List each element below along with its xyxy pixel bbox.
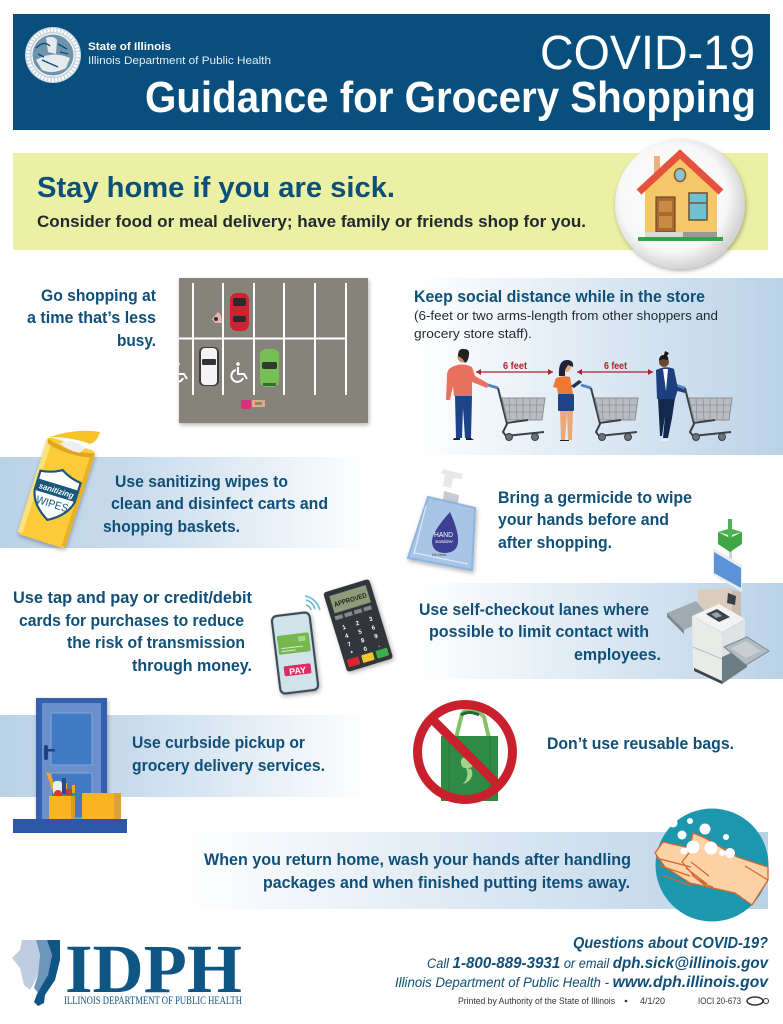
- text: delivery advice: Consider food or meal delivery; have family or friends shop for you.: [37, 213, 586, 231]
- icon: self-checkout kiosk: [667, 519, 769, 684]
- text: go shopping at quiet time: [27, 287, 156, 350]
- icon: state seal: [25, 27, 81, 83]
- icon: wipes canister: [17, 431, 100, 549]
- illustration: parking lot: [171, 278, 368, 423]
- icon: phone paying by tap: [271, 596, 320, 694]
- text: six feet explanation: grocery store staff).: [414, 326, 532, 341]
- text: use wipes: Use sanitizing wipes to: [115, 473, 288, 491]
- print line: [458, 996, 768, 1006]
- text: curbside: grocery delivery services.: [132, 757, 325, 775]
- icon: card terminal: 8: [360, 638, 366, 645]
- red car: [230, 293, 249, 331]
- text: go shopping at quiet time: busy.: [117, 332, 156, 350]
- print line: Printed by Authority of the State of Illinois: [458, 996, 615, 1006]
- text: go shopping at quiet time: Go shopping at: [41, 287, 156, 305]
- icon: card terminal: 3: [369, 616, 374, 623]
- print line: IOCI 20-673: [698, 996, 741, 1006]
- icon: washing hands: [655, 808, 768, 922]
- panel: self-checkout: [415, 583, 783, 679]
- person: woman with tablet: [553, 360, 638, 441]
- contact information: Call 1-800-889-3931 or email dph.sick@illinois.gov: [427, 955, 769, 972]
- text: use wipes: shopping baskets.: [103, 518, 240, 536]
- panel: curbside pickup: [0, 715, 370, 797]
- wheelchair symbols: [171, 362, 247, 382]
- agency name: [88, 41, 271, 67]
- icon: hand sanitizer bottle: HAND: [434, 532, 453, 539]
- contact information: Illinois Department of Public Health - www.dph.illinois.gov: [395, 974, 769, 991]
- icon: card terminal: APPROVED: [333, 592, 368, 609]
- icon: card terminal: 1: [342, 625, 347, 631]
- panel: stay home: [13, 153, 768, 250]
- text: tap and pay: through money.: [132, 657, 252, 675]
- panel: wash hands: [180, 832, 768, 909]
- shoppers in lot: [212, 312, 265, 409]
- icon: card terminal: 6: [371, 625, 377, 632]
- logo: IDPH: [12, 931, 242, 1007]
- icon: hand sanitizer bottle: Sanitizer: [435, 539, 454, 544]
- header banner: [13, 14, 770, 130]
- print line: 4/1/20: [640, 996, 665, 1006]
- agency name: Illinois Department of Public Health: [88, 55, 271, 67]
- wordmark: IDPH: [65, 931, 242, 1007]
- icon: card terminal: .: [377, 643, 381, 649]
- text: bring a germicide: after shopping.: [498, 534, 612, 552]
- text: bring a germicide: Bring a germicide to wipe: [498, 489, 692, 507]
- text: tap and pay: cards for purchases to reduce: [19, 612, 244, 630]
- icon: wipes canister: sanitizing: [38, 481, 75, 500]
- text: bring a germicide: [498, 489, 692, 552]
- text: wash hands: packages and when finished putting items away.: [263, 874, 630, 892]
- panel: social distance: [414, 278, 783, 455]
- text: self-checkout lanes: employees.: [574, 646, 661, 664]
- text: tap and pay: Use tap and pay or credit/debit: [13, 589, 252, 607]
- text: no reusable bags: Don’t use reusable bags.: [547, 735, 734, 753]
- icon: card terminal: 5: [358, 629, 363, 636]
- icon: card terminal: 7: [347, 642, 353, 649]
- wordmark subtitle: ILLINOIS DEPARTMENT OF PUBLIC HEALTH: [64, 995, 242, 1007]
- distance arrows: [476, 361, 653, 375]
- contact information: Questions about COVID-19?: [573, 935, 768, 952]
- text: six feet explanation: (6-feet or two arms-length from other shoppers and: [414, 308, 718, 323]
- text: use wipes: [103, 473, 328, 536]
- text: wash hands: [204, 851, 631, 892]
- panel: sanitizing wipes: [0, 457, 370, 548]
- green car: [260, 349, 279, 387]
- icon: card terminal: 4: [344, 633, 350, 640]
- title: COVID-19: COVID-19: [540, 27, 755, 80]
- icon: Illinois outline layers: [12, 940, 60, 1006]
- icon: phone paying by tap: PAY: [289, 665, 307, 677]
- white car: [199, 347, 219, 386]
- person: man with cart: [446, 349, 545, 440]
- text: go shopping at quiet time: a time that’s less: [27, 309, 156, 327]
- icon: house in circle: [615, 139, 745, 269]
- text: self-checkout lanes: [419, 601, 661, 664]
- text: six feet explanation: [414, 308, 718, 341]
- icon: card terminal: 2: [355, 620, 361, 627]
- text: tap and pay: [13, 589, 252, 675]
- distance arrows: 6 feet: [503, 361, 528, 372]
- icon: no reusable bags: [418, 704, 512, 801]
- icon: card terminal: [323, 579, 393, 672]
- icon: card terminal: *: [350, 651, 355, 657]
- icon: door with deliveries: [13, 698, 127, 833]
- person: woman in blazer: [656, 351, 732, 441]
- text: bring a germicide: your hands before and: [498, 511, 669, 529]
- text: self-checkout lanes: possible to limit contact with: [429, 623, 649, 641]
- text: wash hands: When you return home, wash your hands after handling: [204, 851, 631, 869]
- contact information: [395, 935, 769, 991]
- icon: wipes canister: WIPES: [35, 494, 70, 515]
- text: tap and pay: the risk of transmission: [67, 634, 245, 652]
- heading: keep social distance: Keep social distance while in the store: [414, 288, 705, 306]
- text: self-checkout lanes: Use self-checkout lanes where: [419, 601, 649, 619]
- icon: hand sanitizer bottle: 10k Germs: [432, 552, 446, 557]
- text: curbside: [132, 734, 325, 775]
- icon: card terminal: 9: [374, 634, 379, 641]
- heading: stay home: Stay home if you are sick.: [37, 172, 395, 204]
- distance arrows: 6 feet: [604, 361, 628, 372]
- icon: card terminal: 0: [363, 646, 369, 653]
- agency name: State of Illinois: [88, 41, 171, 53]
- icon: hand sanitizer bottle: [408, 469, 475, 570]
- text: curbside: Use curbside pickup or: [132, 734, 306, 752]
- text: use wipes: clean and disinfect carts and: [111, 495, 328, 513]
